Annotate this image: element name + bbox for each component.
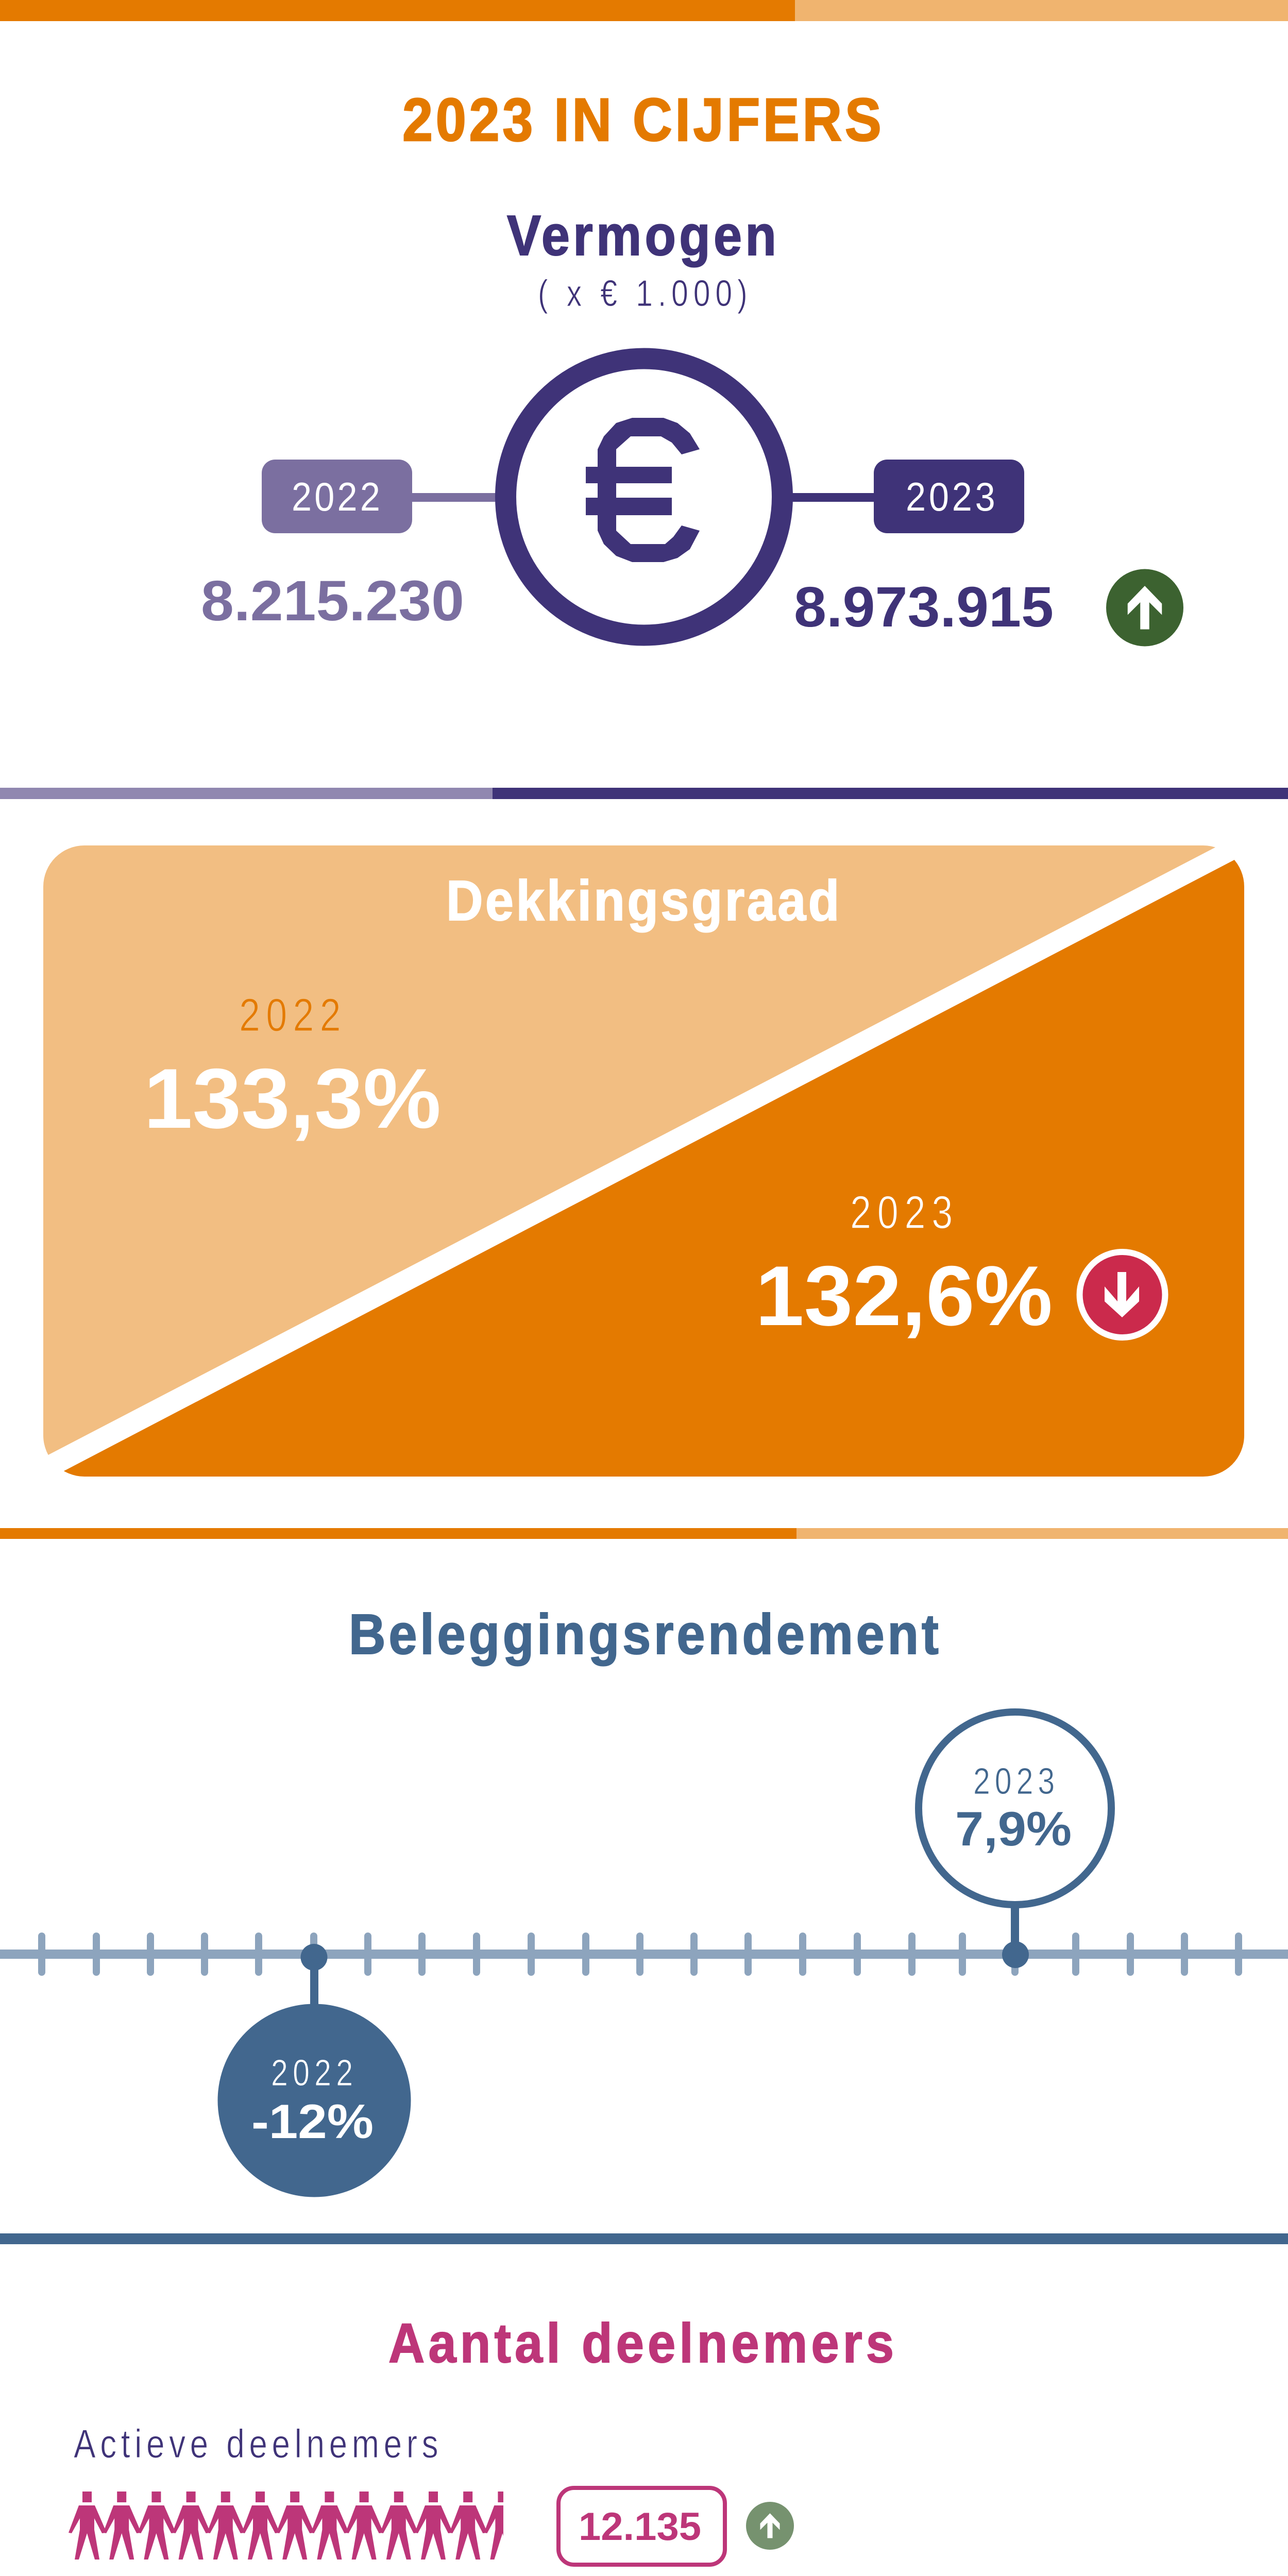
icon: euro coin — [506, 359, 782, 635]
badge 2023: 2023 — [906, 474, 995, 519]
triangle 2023 — [64, 860, 1244, 1477]
panel: aantal deelnemers — [69, 2321, 892, 2567]
marker 2023: 7,9% — [955, 1802, 1072, 1856]
panel: dekkingsgraad — [21, 837, 1278, 1494]
icon: up arrow — [1106, 569, 1183, 646]
timeline — [0, 1933, 1288, 1976]
badge 2022 — [262, 460, 412, 533]
year 2022: 2022 — [239, 990, 341, 1041]
panel: vermogen — [201, 204, 1183, 646]
divider: vermogen — [0, 788, 1288, 799]
marker 2022: 2022 — [271, 2052, 353, 2093]
badge 2023 — [874, 460, 1024, 533]
label: actieve deelnemers: Actieve deelnemers — [74, 2421, 438, 2466]
divider: beleggingsrendement — [0, 2233, 1288, 2244]
badge 2022: 2022 — [292, 474, 380, 519]
value 2022: 8.215.230 — [201, 569, 464, 633]
people row: actieve 2023 — [69, 2492, 522, 2560]
panel: beleggingsrendement — [0, 1603, 1288, 2197]
icon: up arrow actieve — [746, 2502, 794, 2550]
value 2022: 133,3% — [144, 1051, 441, 1146]
heading: aantal deelnemers: Aantal deelnemers — [388, 2312, 894, 2374]
top colour bar — [0, 0, 1288, 21]
heading: dekkingsgraad: Dekkingsgraad — [446, 869, 839, 933]
connector 2022 — [407, 493, 500, 502]
value box: actieve 2023: 12.135 — [579, 2505, 701, 2549]
marker 2022: -12% — [251, 2094, 374, 2148]
value 2023: 132,6% — [755, 1248, 1053, 1343]
divider: dekkingsgraad — [0, 1528, 1288, 1539]
heading: beleggingsrendement: Beleggingsrendement — [349, 1603, 939, 1666]
connector 2023 — [788, 493, 876, 502]
icon: down arrow — [1080, 1252, 1165, 1337]
value 2023: 8.973.915 — [794, 575, 1054, 639]
year 2023: 2023 — [850, 1187, 953, 1239]
marker 2022 — [217, 1944, 411, 2197]
subheading: unit: ( x € 1.000) — [538, 272, 748, 314]
value box: actieve 2023 — [558, 2488, 725, 2565]
title: 2023 IN CIJFERS — [402, 86, 882, 154]
marker 2023: 2023 — [973, 1760, 1055, 1802]
heading: vermogen: Vermogen — [507, 204, 776, 267]
triangle 2022 — [43, 845, 1219, 1458]
marker 2023 — [919, 1712, 1111, 1968]
